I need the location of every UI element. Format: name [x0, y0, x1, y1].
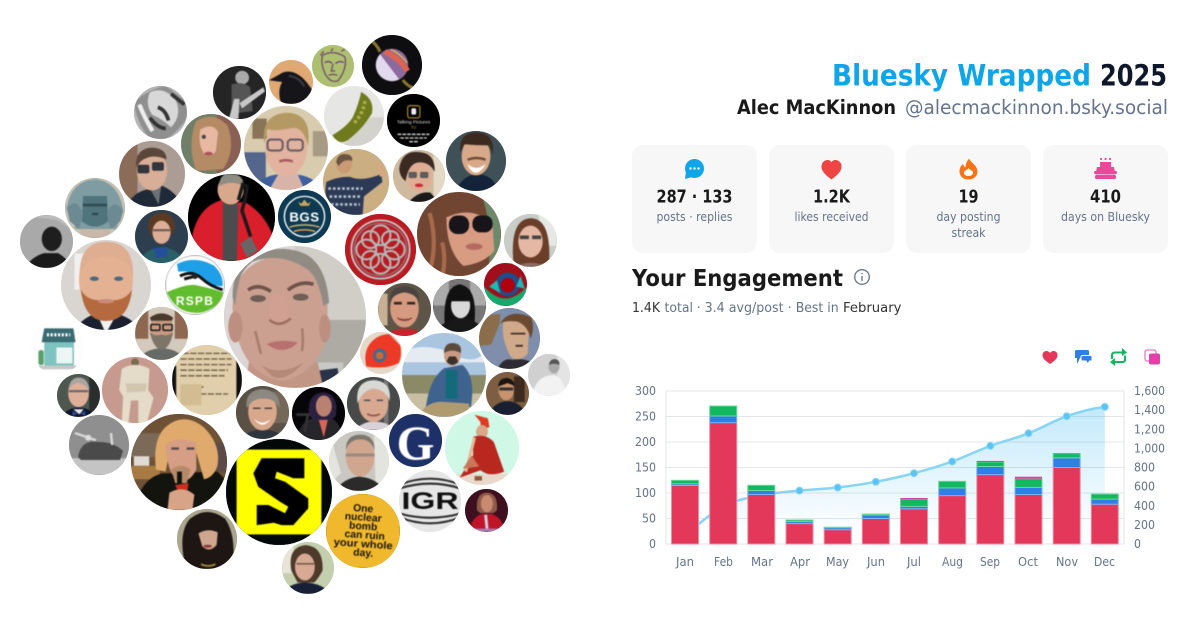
avatar: red hat object	[360, 332, 402, 374]
right axis labels: 600	[1134, 480, 1155, 494]
stat card: likes received: likes received	[794, 210, 868, 224]
right axis labels: 400	[1134, 499, 1155, 513]
panel: circle-packed avatars of top interactions	[20, 35, 570, 594]
stat card: day posting streak	[906, 145, 1031, 253]
avatar: BGS logo	[278, 190, 331, 243]
month labels: Apr	[790, 555, 810, 569]
stat card: days on Bluesky	[1043, 145, 1168, 253]
avatar: Talking Pictures TV logo: TV	[411, 125, 416, 130]
stat card: days on Bluesky: days on Bluesky	[1061, 210, 1150, 224]
avatar: man with wig and pipe	[131, 414, 227, 510]
avatar: nuclear bomb button: your whole	[333, 537, 393, 552]
engagement summary line: February	[843, 300, 902, 316]
avatar: red and gold robed figure on mint	[445, 411, 519, 485]
avatar: yellow and black S logo	[226, 439, 332, 545]
month labels: Dec	[1094, 555, 1115, 569]
right axis labels: 200	[1134, 518, 1155, 532]
avatar: white haired man smiling	[347, 377, 400, 430]
avatar: guitarist in black and white	[213, 66, 266, 119]
avatar: grey silhouette	[20, 215, 73, 268]
avatar: red and teal abstract eye	[484, 263, 527, 306]
engagement summary line: 3.4 avg/post	[705, 300, 784, 316]
avatar: woman with curly hair and glasses	[135, 210, 188, 263]
stat card: posts and replies: posts · replies	[656, 210, 732, 224]
avatar: woman in large sunglasses	[417, 192, 501, 276]
stat card: days on Bluesky: 410	[1090, 186, 1121, 208]
right axis labels	[1134, 384, 1165, 551]
avatar: older woman with glasses on video call	[244, 106, 328, 190]
avatar: woman in red suit at podium	[465, 489, 508, 532]
avatar: woman at podium on black	[292, 387, 345, 440]
avatar: BGS logo: BGS	[289, 209, 320, 224]
panel: title and stats and engagement chart	[631, 58, 1168, 569]
month labels: Jul	[906, 555, 921, 569]
heading: your engagement: Your Engagement	[631, 266, 843, 292]
stat card: likes received: 1.2K	[813, 186, 851, 208]
avatar: nuclear bomb button: day.	[353, 547, 374, 560]
left axis labels: 200	[635, 435, 656, 449]
engagement summary line: 1.4K	[632, 300, 661, 316]
engagement summary line: total	[664, 300, 693, 316]
engagement summary line	[632, 300, 902, 316]
avatar: pickle on white	[324, 86, 384, 146]
avatar: smiling man with dark brows	[378, 283, 431, 336]
avatar: nuclear bomb button: bomb	[349, 521, 378, 533]
right axis labels: 1,600	[1134, 384, 1165, 398]
avatar: IGR logo: IGR	[401, 488, 459, 515]
avatar: nuclear bomb button: nuclear	[344, 511, 382, 525]
title: Bluesky Wrapped	[832, 58, 1091, 92]
avatar: bearded man with glasses and bookshelves	[135, 307, 188, 360]
left axis labels: 50	[642, 512, 656, 526]
month labels: Nov	[1056, 555, 1078, 569]
avatar: man with glasses and bow tie	[57, 374, 100, 417]
avatar: black and white man in white shirt	[528, 354, 570, 396]
month labels: Jun	[866, 555, 885, 569]
avatar: bald bearded man in suit	[61, 240, 151, 330]
profile name and handle	[737, 96, 1168, 119]
avatar: RSPB logo: RSPB	[176, 294, 214, 308]
left axis labels: 100	[635, 486, 656, 500]
stat card: posts and replies	[632, 145, 757, 253]
profile name and handle: @alecmackinnon.bsky.social	[905, 96, 1168, 119]
stat card: day posting streak: streak	[952, 226, 986, 240]
avatar: Saturn on black	[362, 35, 422, 95]
month labels: May	[826, 555, 849, 569]
avatar: man in red jacket on telephone	[188, 174, 275, 261]
chart: monthly engagement stacked bars with cumulative line	[635, 384, 1165, 569]
avatar: nuclear bomb button	[326, 494, 400, 568]
cumulative area	[685, 407, 1105, 544]
left axis labels: 250	[635, 410, 656, 424]
stat card: day posting streak: day posting	[936, 210, 1000, 224]
left axis labels: 150	[635, 460, 656, 474]
engagement summary line: ·	[788, 300, 792, 316]
profile name and handle: Alec MacKinnon	[737, 96, 896, 119]
avatar: figure illustration on pink	[102, 357, 168, 423]
avatar: King Crimson celtic knot on red	[345, 214, 416, 285]
avatar: man with dark glasses	[119, 141, 185, 207]
right axis labels: 1,200	[1134, 422, 1165, 436]
avatar: woman with glasses and brown hair	[504, 214, 557, 267]
stat card: posts and replies: 287 · 133	[656, 186, 732, 208]
month labels: Jan	[675, 555, 694, 569]
avatar: handwritten parchment	[172, 345, 242, 415]
avatar: smiling grey-haired man	[236, 386, 289, 439]
cumulative line with markers	[685, 403, 1108, 532]
right axis labels: 1,000	[1134, 442, 1165, 456]
title: 2025	[1100, 58, 1167, 92]
avatar: blonde woman selfie	[181, 114, 241, 174]
left axis labels: 300	[635, 384, 656, 398]
avatar: large portrait of the account owner	[224, 246, 366, 388]
avatar: painted portrait of man with hand in hair	[479, 308, 540, 369]
engagement summary line: Best in	[796, 300, 839, 316]
engagement summary line: ·	[696, 300, 701, 316]
icon: info	[855, 270, 869, 284]
avatar: man with glasses in brown room	[486, 372, 529, 415]
right axis labels: 1,400	[1134, 403, 1165, 417]
avatar: man in blue jacket sitting outdoors	[402, 333, 486, 417]
avatar: woman with long dark hair	[177, 509, 237, 569]
avatar: man with glasses and grey hair	[329, 431, 389, 491]
month labels: Aug	[942, 555, 963, 569]
avatar: illustrated teal shop building	[31, 321, 84, 374]
avatar: RSPB logo	[165, 255, 225, 315]
avatar: sweater man pointing	[323, 149, 389, 215]
month labels: Sep	[980, 555, 1000, 569]
avatar: sculpture in greyscale	[134, 86, 187, 139]
avatar: crow on orange background	[269, 60, 313, 104]
avatar: nuclear bomb button: One	[353, 503, 374, 515]
legend icons	[1042, 348, 1160, 366]
stacked bars	[672, 406, 1118, 544]
avatar: engraving of figures in greyscale	[69, 415, 129, 475]
avatar: Talking Pictures TV logo: Talking Pictures	[397, 120, 431, 126]
left axis labels: 0	[649, 537, 656, 551]
avatar: woman with curly brown hair outdoors	[282, 542, 334, 594]
avatar: line drawing of a face on green	[312, 45, 354, 87]
right axis labels: 800	[1134, 460, 1155, 474]
month labels	[675, 555, 1115, 569]
stat card: day posting streak: 19	[958, 186, 978, 208]
avatar: nuclear bomb button: can ruin	[344, 529, 385, 543]
avatar: IGR logo	[399, 470, 461, 532]
month labels: Oct	[1018, 555, 1038, 569]
avatar: black and white woman with bangs	[433, 279, 486, 332]
avatar: Talking Pictures TV logo	[387, 94, 440, 147]
right axis labels: 0	[1134, 537, 1141, 551]
avatar: smiling man with dark hair	[446, 131, 506, 191]
month labels: Feb	[714, 555, 733, 569]
month labels: Mar	[751, 555, 773, 569]
left axis labels	[635, 384, 656, 551]
stat card: likes received	[769, 145, 894, 253]
avatar: bronze statue with hands on head	[65, 178, 125, 238]
avatar: The Guardian G logo	[389, 414, 442, 467]
avatar: woman with curly hair and red lipstick	[393, 150, 445, 202]
